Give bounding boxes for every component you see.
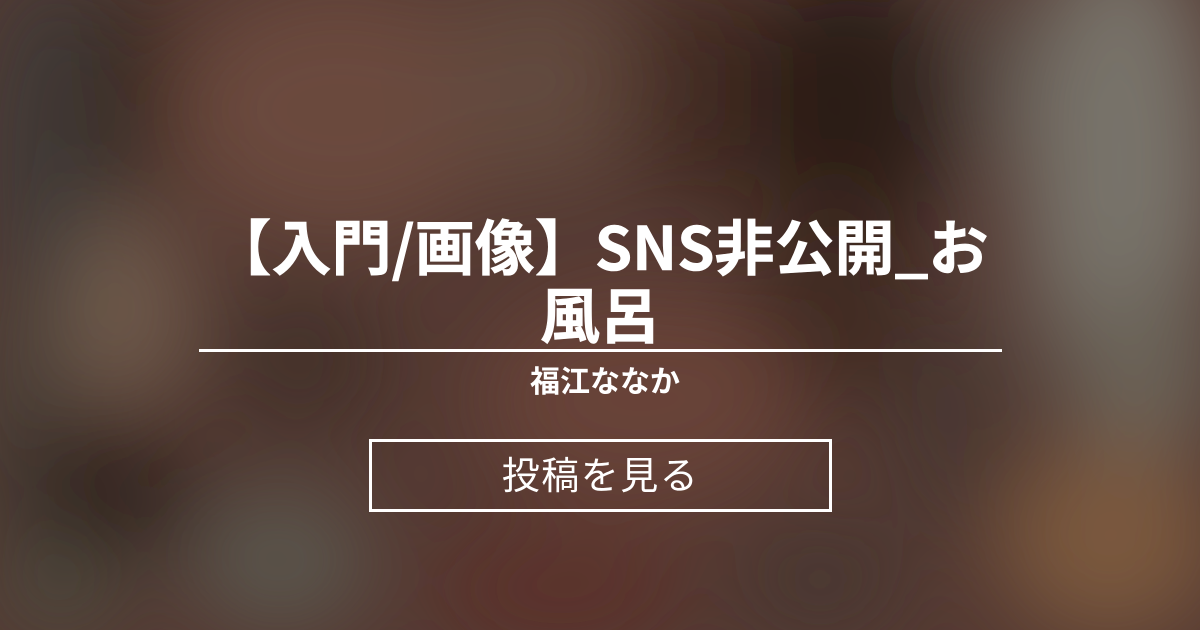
divider line — [199, 349, 1002, 352]
title — [211, 201, 989, 356]
author name: 福江ななか — [530, 357, 680, 401]
button: view post — [369, 439, 832, 512]
title: 風呂 — [540, 269, 660, 356]
title: 【入門/画像】SNS非公開_お — [211, 201, 989, 288]
button: view post: 投稿を見る — [502, 445, 699, 500]
